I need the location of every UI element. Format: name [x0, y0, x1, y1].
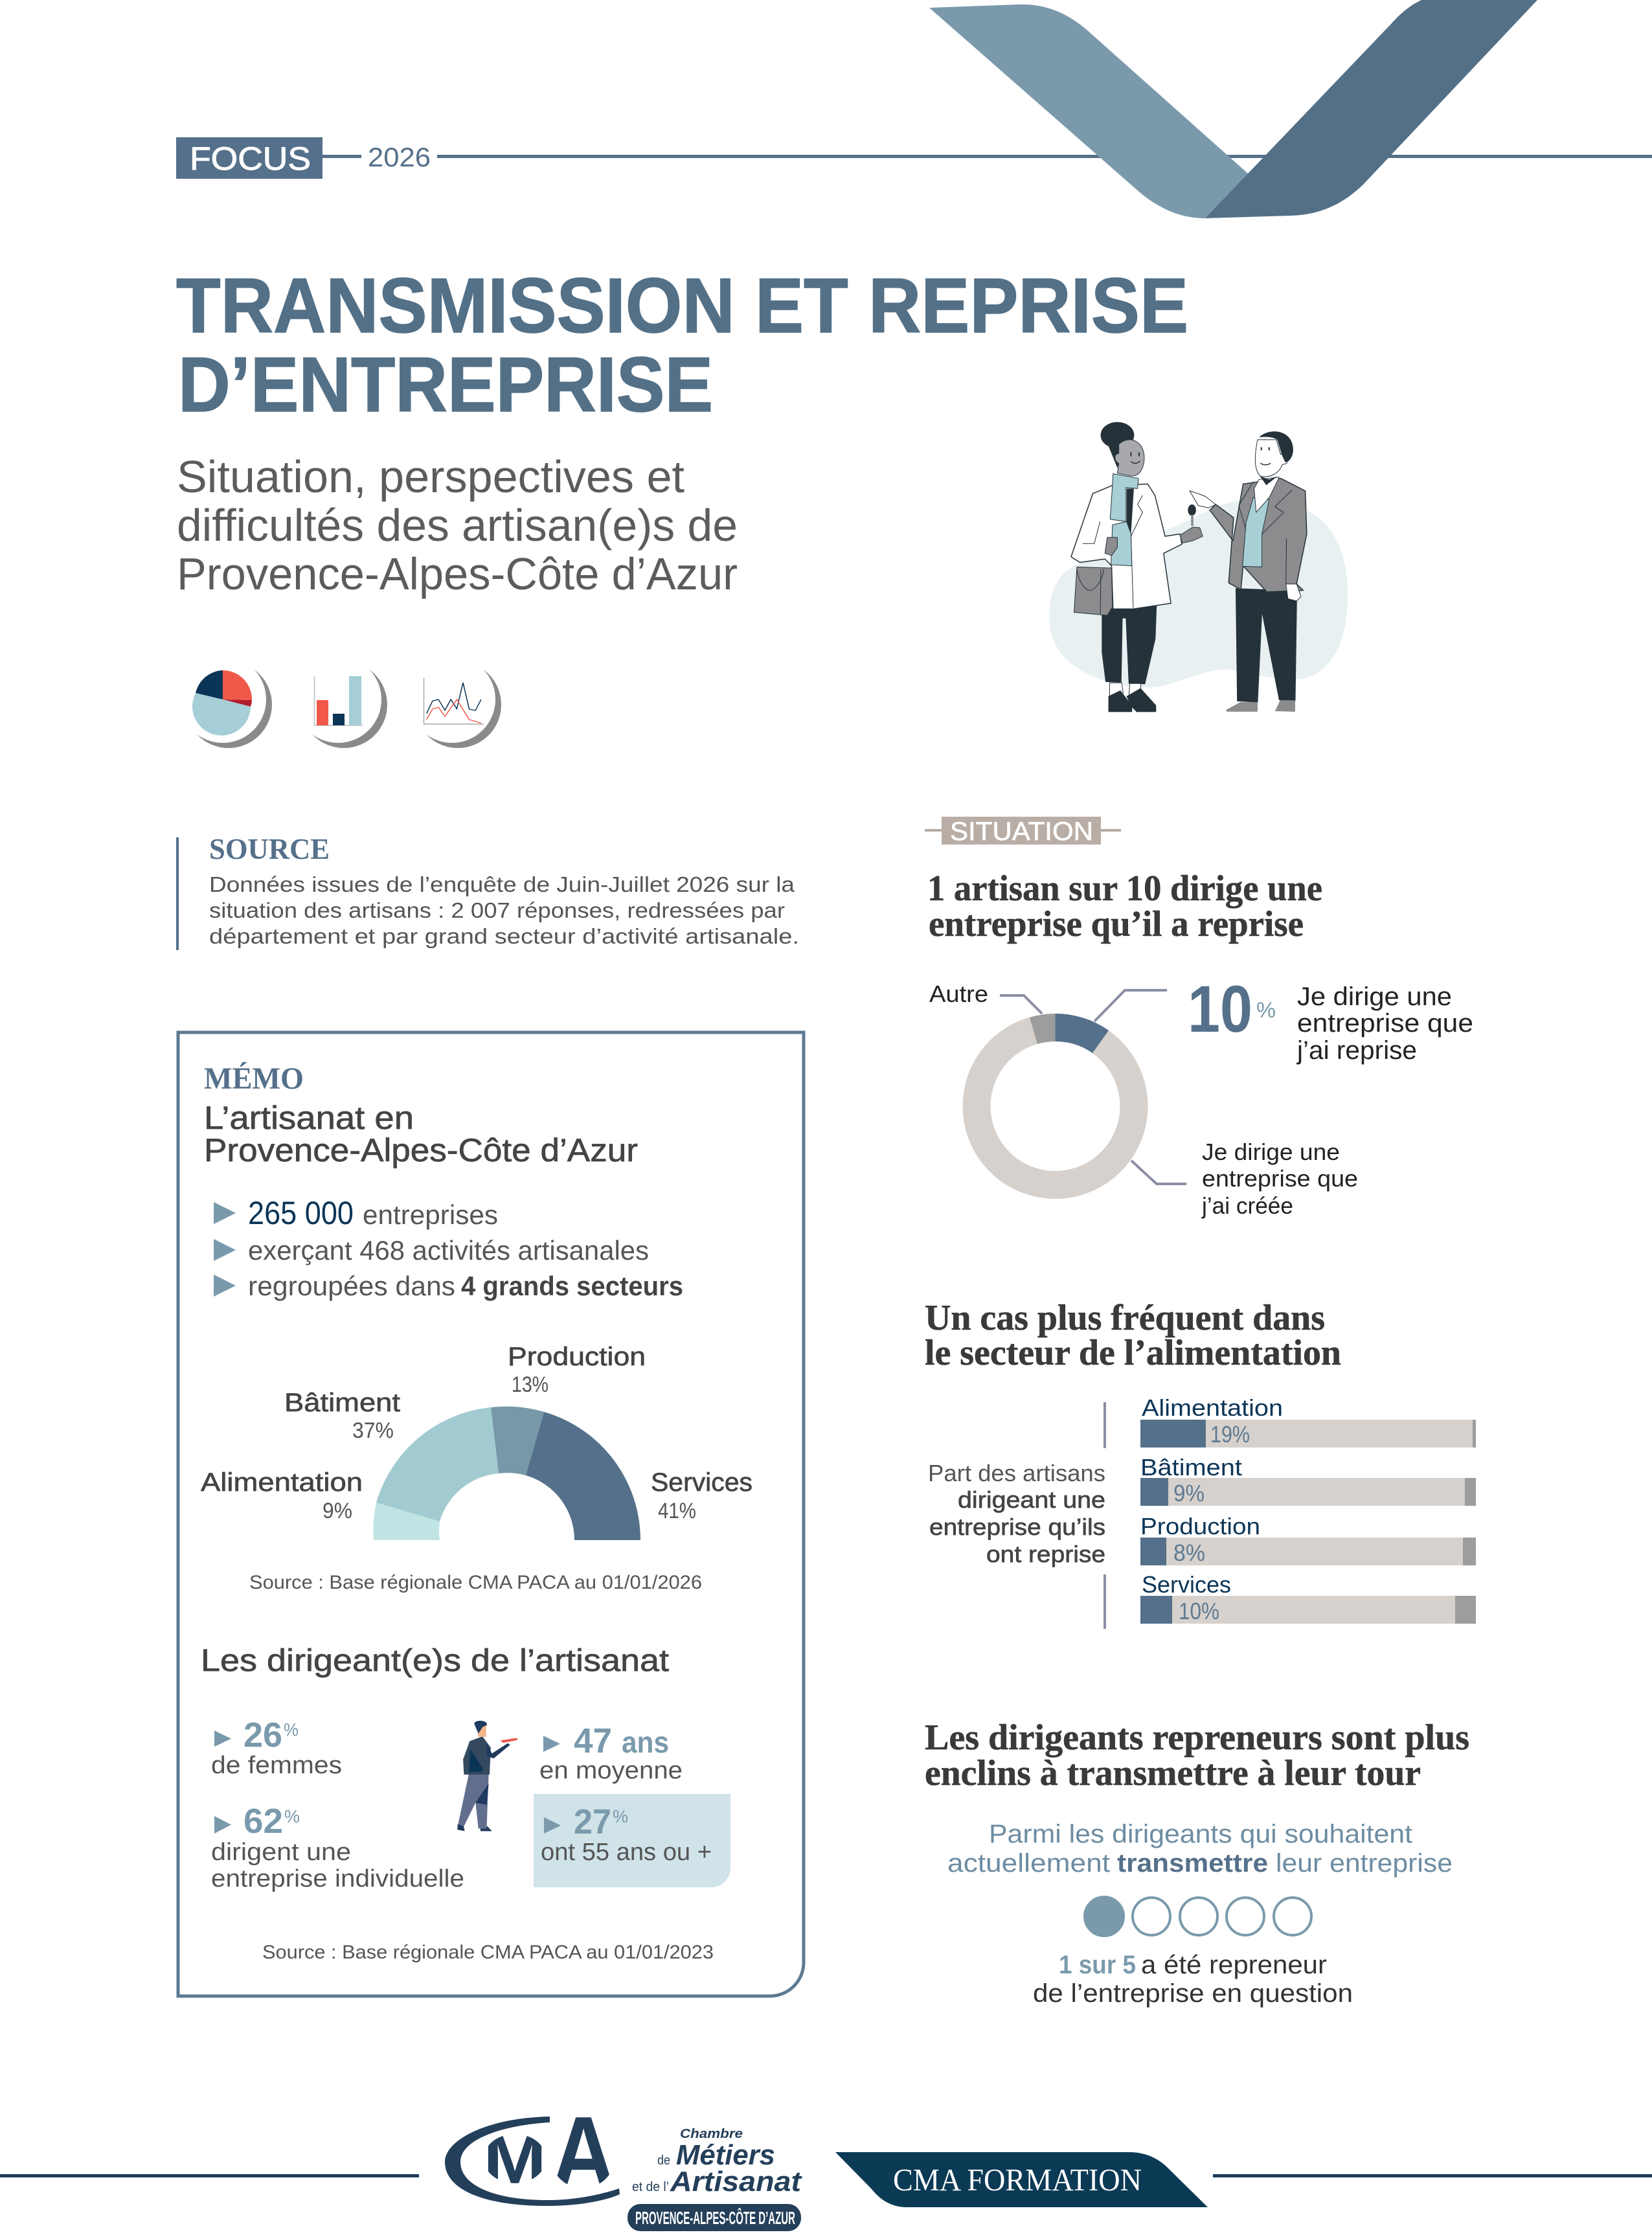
- donut chart: [977, 1014, 1134, 1185]
- stat: sole proprietors: [211, 1802, 464, 1892]
- half donut chart: [373, 1407, 640, 1540]
- source block: SOURCE: [209, 832, 330, 865]
- situation badge: [925, 817, 1121, 846]
- bar: production: 8%: [1173, 1539, 1205, 1566]
- bar: services: Services: [1142, 1571, 1231, 1598]
- bar: alimentation: [1140, 1394, 1476, 1448]
- half donut labels: Bâtiment: [284, 1389, 400, 1417]
- bar: services: 10%: [1179, 1598, 1219, 1624]
- half donut labels: Production: [508, 1343, 646, 1371]
- stat: average age: 47: [574, 1721, 612, 1760]
- stat: average age: en moyenne: [539, 1757, 683, 1784]
- bar: batiment: 9%: [1173, 1480, 1205, 1506]
- stat: women: 26: [243, 1716, 282, 1754]
- source note 2026: Source : Base régionale CMA PACA au 01/01/2026: [249, 1572, 702, 1593]
- caption: 1 sur 5: de l’entreprise en question: [1033, 1979, 1353, 2008]
- half donut labels: [201, 1343, 752, 1523]
- man: [1188, 431, 1307, 712]
- donut label: created: Je dirige une: [1202, 1139, 1340, 1165]
- logo wording: [632, 2127, 802, 2197]
- bar: batiment: [1140, 1454, 1476, 1506]
- donut callout: 10 percent: j’ai reprise: [1296, 1036, 1417, 1065]
- icon: standing man: [457, 1721, 517, 1831]
- bars left caption: [928, 1402, 1106, 1629]
- donut callout: 10 percent: [1188, 972, 1473, 1065]
- caption: 1 sur 5: a été repreneur: [1141, 1951, 1327, 1979]
- logo region pill: PROVENCE-ALPES-CÔTE D’AZUR: [635, 2207, 795, 2228]
- memo key figures: regroupées dans: [248, 1271, 455, 1301]
- footer rules: [0, 2174, 1652, 2177]
- stat: aged 55 plus: %: [613, 1806, 628, 1826]
- half donut labels: 13%: [512, 1372, 549, 1397]
- bars left caption: entreprise qu’ils: [929, 1514, 1105, 1540]
- highlight box: [534, 1794, 730, 1887]
- source note 2023: Source : Base régionale CMA PACA au 01/01/2023: [262, 1942, 714, 1963]
- stat: sole proprietors: entreprise individuelle: [211, 1865, 464, 1892]
- logo wording: Artisanat: [670, 2166, 802, 2197]
- ribbon logo mark: [929, 0, 1537, 218]
- bars left caption: ont reprise: [986, 1541, 1105, 1567]
- donut callout: 10 percent: entreprise que: [1297, 1009, 1473, 1038]
- logo wording: et de l’: [632, 2180, 669, 2194]
- donut callout: 10 percent: Je dirige une: [1297, 982, 1452, 1011]
- intro text: transmettre: actuellement: [947, 1849, 1110, 1878]
- stat: sole proprietors: %: [284, 1806, 300, 1826]
- stat: women: %: [284, 1720, 299, 1740]
- intro text: transmettre: transmettre: [1117, 1849, 1268, 1878]
- half donut labels: 41%: [658, 1499, 696, 1523]
- header rule: [322, 155, 1652, 158]
- heading: 1 artisan sur 10: [927, 869, 1322, 944]
- donut leader lines: [1000, 990, 1186, 1184]
- heading: repreneurs: Les dirigeants repreneurs sont plus: [925, 1718, 1469, 1758]
- cma formation banner: [835, 2152, 1208, 2207]
- memo key figures: [214, 1195, 683, 1301]
- heading: repreneurs: [925, 1718, 1469, 1793]
- icon: bar chart: [295, 656, 387, 748]
- subtitle: difficultés des artisan(e)s de: [177, 500, 738, 551]
- stat: aged 55 plus: [541, 1802, 712, 1866]
- logo region pill: [628, 2204, 801, 2231]
- memo heading: MÉMO: [204, 1062, 304, 1096]
- memo key figures: 265 000: [248, 1195, 354, 1231]
- memo key figures: entreprises: [363, 1199, 498, 1230]
- bars left caption: dirigeant une: [958, 1486, 1105, 1513]
- caption: 1 sur 5: 1 sur 5: [1059, 1951, 1136, 1979]
- stat: women: [211, 1716, 342, 1779]
- bar: production: Production: [1140, 1513, 1260, 1539]
- source block: [176, 832, 799, 950]
- stat: sole proprietors: 62: [243, 1802, 283, 1841]
- year: 2026: [368, 142, 431, 172]
- logo wording: Chambre: [680, 2127, 743, 2141]
- bar: alimentation: 19%: [1210, 1421, 1250, 1448]
- donut label: created: j’ai créée: [1201, 1192, 1293, 1219]
- logo wording: de: [657, 2153, 670, 2168]
- logo wording: Métiers: [676, 2139, 775, 2171]
- donut label: other: Autre: [929, 981, 988, 1007]
- stat: aged 55 plus: ont 55 ans ou +: [541, 1839, 712, 1866]
- panel: memo: [178, 1032, 804, 1996]
- donut label: created: [1201, 1139, 1358, 1219]
- logo: CMA: [445, 2117, 620, 2206]
- heading: 1 artisan sur 10: 1 artisan sur 10 dirige une: [927, 869, 1322, 909]
- heading: secteur alimentation: Un cas plus fréquent dans: [925, 1298, 1325, 1338]
- illustration: key handover: [1049, 422, 1348, 712]
- bar: batiment: Bâtiment: [1140, 1454, 1242, 1481]
- source block: Données issues de l’enquête de Juin-Juillet 2026 sur la: [209, 872, 795, 896]
- stat: women: de femmes: [211, 1752, 342, 1779]
- focus badge: FOCUS: [190, 141, 311, 177]
- intro text: transmettre: leur entreprise: [1276, 1849, 1453, 1878]
- heading: secteur alimentation: [925, 1298, 1341, 1373]
- focus badge: [176, 137, 322, 179]
- heading: repreneurs: enclins à transmettre à leur tour: [925, 1753, 1421, 1793]
- situation badge: SITUATION: [950, 817, 1093, 846]
- title: D’ENTREPRISE: [178, 341, 713, 428]
- half donut labels: 37%: [352, 1418, 394, 1443]
- memo key figures: exerçant 468 activités artisanales: [248, 1235, 649, 1266]
- memo subtitle: [204, 1100, 638, 1168]
- caption: 1 sur 5: [1033, 1951, 1353, 2008]
- donut callout: 10 percent: %: [1256, 998, 1276, 1023]
- pictogram: 1 in 5 circles: [1085, 1897, 1311, 1936]
- title: [176, 262, 1188, 428]
- woman: [1071, 422, 1203, 712]
- cma formation banner: CMA FORMATION: [893, 2162, 1142, 2197]
- bar: production: [1140, 1513, 1476, 1566]
- bar: services: [1140, 1571, 1476, 1624]
- intro text: transmettre: Parmi les dirigeants qui souhaitent: [989, 1820, 1412, 1848]
- title: TRANSMISSION ET REPRISE: [176, 262, 1188, 349]
- bars left caption: Part des artisans: [928, 1460, 1105, 1486]
- stat: sole proprietors: dirigent une: [211, 1839, 351, 1866]
- icon: line chart: [409, 656, 501, 748]
- leaders heading: Les dirigeant(e)s de l’artisanat: [201, 1644, 669, 1678]
- memo subtitle: Provence-Alpes-Côte d’Azur: [204, 1132, 638, 1168]
- half donut labels: Services: [651, 1468, 752, 1497]
- heading: secteur alimentation: le secteur de l’alimentation: [925, 1333, 1341, 1373]
- logo: CMA: M: [483, 2122, 547, 2198]
- source block: situation des artisans : 2 007 réponses, redressées par: [209, 898, 785, 922]
- intro text: transmettre: [947, 1820, 1453, 1878]
- donut callout: 10 percent: 10: [1188, 972, 1252, 1046]
- stat: aged 55 plus: 27: [574, 1802, 611, 1841]
- icon: pie chart: [179, 656, 272, 748]
- subtitle: Situation, perspectives et: [177, 451, 685, 502]
- heading: 1 artisan sur 10: entreprise qu’il a reprise: [929, 904, 1304, 944]
- memo key figures: 4 grands secteurs: [461, 1271, 683, 1301]
- bar: alimentation: Alimentation: [1142, 1394, 1283, 1421]
- donut label: created: entreprise que: [1202, 1165, 1358, 1192]
- stat: average age: ans: [622, 1725, 669, 1759]
- subtitle: Provence-Alpes-Côte d’Azur: [177, 549, 738, 599]
- half donut labels: 9%: [322, 1499, 352, 1523]
- stat: average age: [539, 1721, 683, 1784]
- logo: CMA: A: [551, 2096, 616, 2210]
- half donut labels: Alimentation: [201, 1468, 363, 1497]
- source block: département et par grand secteur d’activité artisanale.: [209, 924, 799, 948]
- subtitle: [177, 451, 738, 599]
- memo subtitle: L’artisanat en: [204, 1100, 414, 1136]
